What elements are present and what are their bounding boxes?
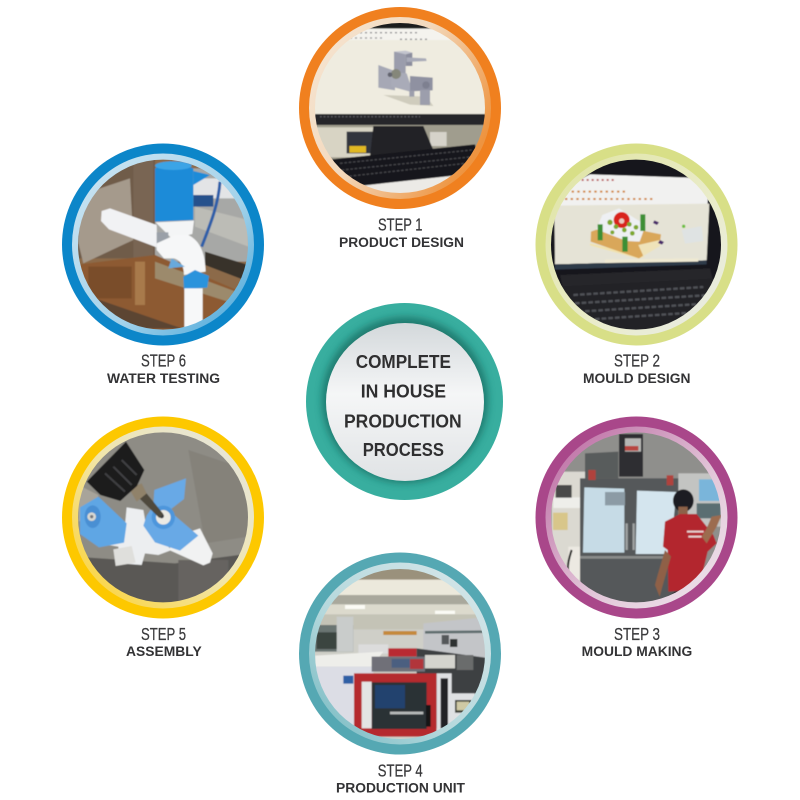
step 1: product design	[299, 7, 501, 250]
photo: drill assembling blue tap	[75, 430, 255, 607]
centre title	[344, 352, 462, 460]
label: step 4: STEP 4	[378, 761, 423, 781]
magenta ring	[536, 416, 738, 618]
step 5: assembly	[62, 416, 264, 659]
label: step 6: STEP 6	[141, 351, 186, 371]
centre title: COMPLETE	[356, 352, 451, 372]
label: step 1: PRODUCT DESIGN	[339, 235, 464, 250]
centre disc	[326, 323, 484, 481]
label: step 5	[126, 624, 202, 659]
label: step 1: STEP 1	[378, 215, 422, 235]
label: step 2: STEP 2	[614, 351, 660, 371]
teal ring	[299, 552, 501, 754]
lime ring	[536, 144, 738, 346]
step 2: mould design	[536, 144, 738, 386]
photo: CNC machine and operator	[551, 432, 721, 602]
step 3: mould making	[536, 416, 738, 659]
label: step 3	[582, 624, 692, 659]
photo: tap under water test	[78, 160, 248, 330]
label: step 2: MOULD DESIGN	[583, 371, 690, 386]
photo: faucet CAD model on monitor	[315, 23, 485, 193]
centre badge	[306, 303, 503, 500]
label: step 3: MOULD MAKING	[582, 644, 692, 659]
centre title: PROCESS	[363, 440, 444, 460]
yellow ring	[62, 416, 264, 618]
blue ring	[62, 144, 264, 346]
centre teal ring	[306, 303, 503, 500]
label: step 6	[107, 351, 220, 386]
label: step 4: PRODUCTION UNIT	[336, 781, 466, 796]
centre title: IN HOUSE	[361, 382, 446, 402]
photo: mould CAD on laptop	[551, 160, 721, 330]
label: step 5: ASSEMBLY	[126, 644, 202, 659]
step 4: production unit	[299, 552, 501, 796]
label: step 5: STEP 5	[141, 624, 186, 644]
label: step 3: STEP 3	[614, 624, 660, 644]
step 6: water testing	[62, 144, 264, 386]
orange ring	[299, 7, 501, 209]
label: step 4	[336, 761, 466, 796]
white tap body	[110, 506, 170, 566]
label: step 1	[339, 215, 464, 250]
photo: injection moulding factory floor	[315, 569, 485, 739]
label: step 2	[583, 351, 690, 386]
centre title: PRODUCTION	[344, 411, 462, 431]
label: step 6: WATER TESTING	[107, 371, 220, 386]
